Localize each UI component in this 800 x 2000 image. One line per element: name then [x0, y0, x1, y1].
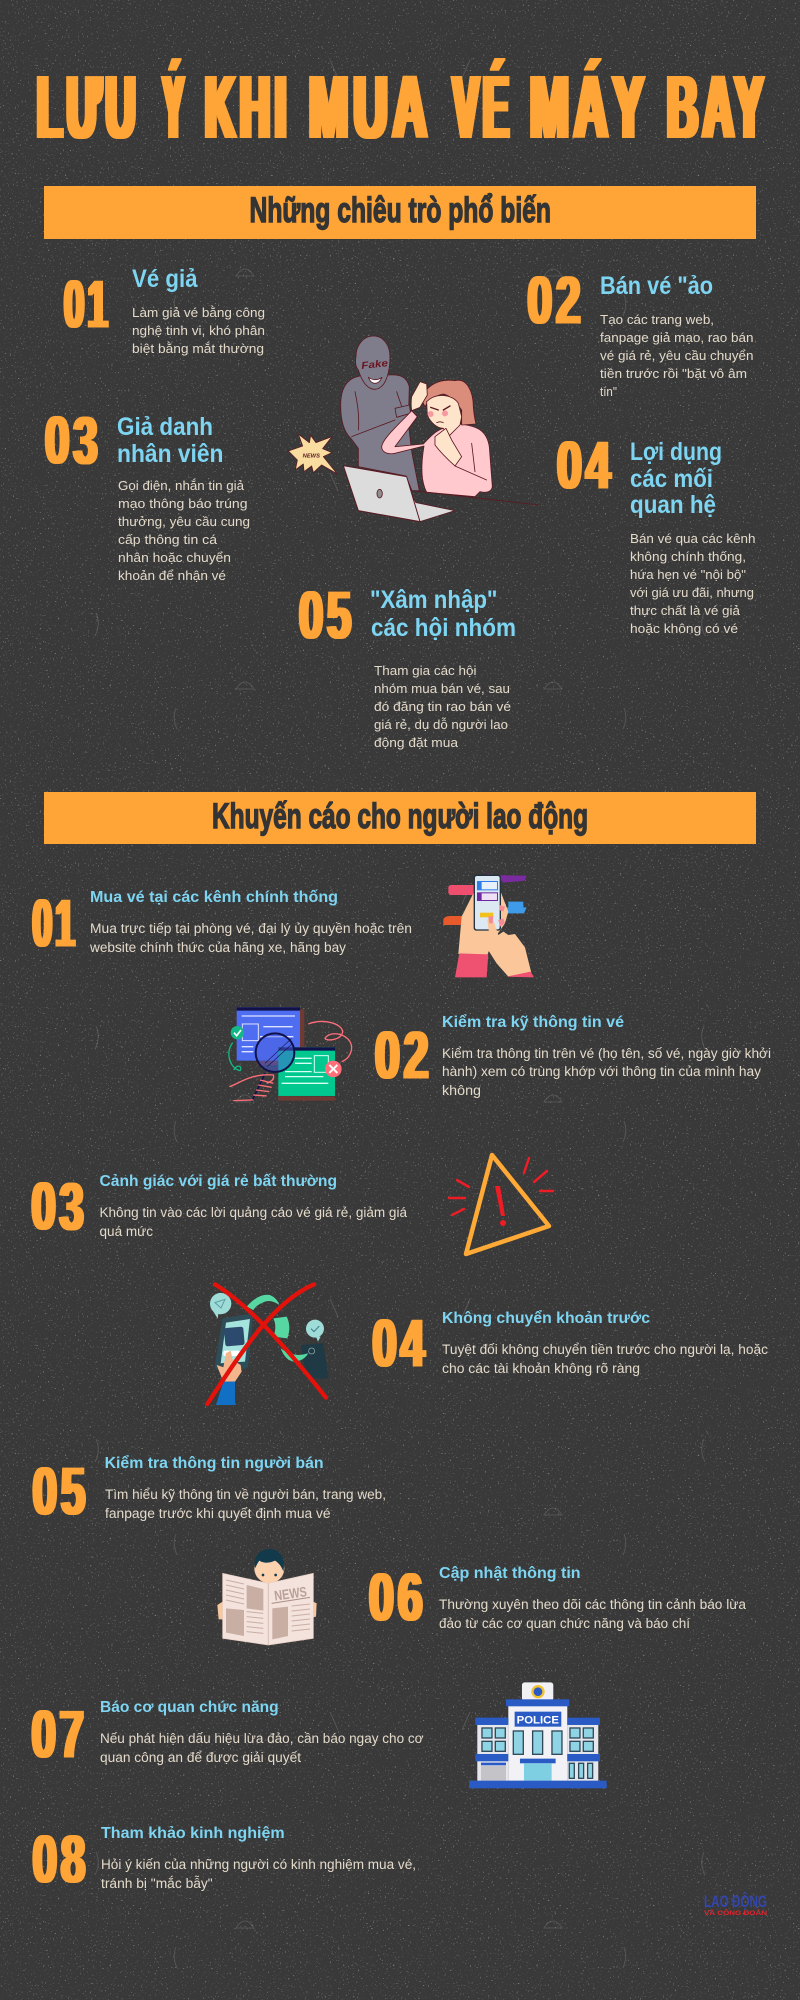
- advice 01: [32, 886, 412, 962]
- description: vé giá rẻ, yêu cầu chuyển: [600, 348, 754, 363]
- receiving phone: [301, 1343, 328, 1379]
- green arrow: [229, 1043, 241, 1071]
- number 02: 02: [528, 262, 584, 338]
- desk line: [413, 491, 539, 505]
- banner heading: Khuyến cáo cho người lao động: [212, 797, 588, 836]
- blue roofs and ledges: [475, 1699, 600, 1765]
- heading: Vé giả: [132, 265, 198, 293]
- description: hứa hẹn vé "nội bộ": [630, 567, 746, 582]
- title: VÉ: [453, 57, 513, 158]
- description: Hỏi ý kiến của những người có kinh nghiệm mua vé,: [101, 1857, 416, 1872]
- heading: Không chuyển khoản trước: [442, 1309, 650, 1327]
- title: MÁY: [530, 57, 649, 158]
- train: [448, 885, 478, 895]
- icon: warning triangle: [449, 1155, 553, 1254]
- hands: [217, 1600, 317, 1619]
- plane: [483, 872, 527, 883]
- description: nghệ tinh vi, khó phân: [132, 323, 265, 338]
- advice 08: [33, 1822, 416, 1898]
- description: quan công an để được giải quyết: [100, 1750, 301, 1765]
- right sleeve: [507, 972, 534, 977]
- illustration: scammer behind worried woman at laptop: [288, 336, 539, 522]
- logo: Lao Động và Công đoàn: [704, 1892, 767, 1917]
- description: động đặt mua: [374, 735, 459, 750]
- description: đó đăng tin rao bán vé: [374, 699, 511, 714]
- description: đảo từ các cơ quan chức năng và báo chí: [439, 1616, 690, 1631]
- left chat bubble: [210, 1293, 231, 1319]
- heading: Báo cơ quan chức năng: [100, 1699, 279, 1716]
- POLICE sign: POLICE: [517, 1715, 559, 1727]
- trick 02: [528, 262, 754, 399]
- description: Tìm hiểu kỹ thông tin về người bán, trang web,: [105, 1487, 386, 1502]
- roof box with badge: [522, 1682, 553, 1701]
- heading: Kiểm tra thông tin người bán: [105, 1454, 324, 1472]
- green document window: [278, 1047, 335, 1096]
- illustration: man reading newspaper: [217, 1549, 317, 1645]
- description: [439, 1597, 746, 1631]
- heading: Lợi dụng: [630, 438, 722, 466]
- entrance doors: [524, 1763, 552, 1781]
- shadow panel: [257, 1009, 335, 1101]
- description: Làm giả vé bằng công: [132, 305, 265, 320]
- left sleeve: [455, 953, 488, 977]
- heading: "Xâm nhập": [370, 586, 498, 614]
- description: website chính thức của hãng xe, hãng bay: [89, 940, 346, 955]
- heading: Cảnh giác với giá rẻ bất thường: [100, 1173, 337, 1190]
- description: không: [442, 1083, 481, 1098]
- number 05: 05: [33, 1454, 89, 1530]
- logo: Lao Động và Công đoàn: LAO ĐỘNG: [704, 1892, 767, 1911]
- title: MUA: [309, 58, 432, 158]
- description: tránh bị "mắc bẫy": [101, 1876, 213, 1891]
- newspaper pages: [223, 1573, 313, 1645]
- description: Kiểm tra thông tin trên vé (họ tên, số vé, ngày giờ khởi: [442, 1046, 771, 1061]
- description: [132, 305, 265, 356]
- sending phone: [215, 1313, 253, 1370]
- advice 02: [375, 1013, 771, 1098]
- description: fanpage giả mạo, rao bán: [600, 330, 754, 345]
- description: hoặc không có vé: [630, 621, 738, 636]
- pointing hand: [485, 918, 532, 977]
- heading: Bán vé "ảo: [600, 272, 713, 300]
- description: tín": [600, 384, 617, 399]
- news burst: NEWS: [303, 453, 320, 459]
- description: tiền trước rồi "bặt vô âm: [600, 366, 747, 381]
- photo blocks: [226, 1585, 288, 1639]
- description: Nếu phát hiện dấu hiệu lừa đảo, cần báo ngay cho cơ: [100, 1731, 424, 1746]
- description: nhân hoặc chuyển: [118, 550, 231, 565]
- description: [89, 921, 412, 955]
- description: [600, 312, 754, 399]
- illustration: police station: [469, 1682, 607, 1788]
- description: Tuyệt đối không chuyển tiền trước cho người lạ, hoặc: [442, 1342, 768, 1357]
- description: mạo thông báo trúng: [118, 496, 248, 511]
- title: LƯU: [37, 58, 140, 158]
- trick 04: quan hệ: [630, 491, 716, 519]
- description: Không tin vào các lời quảng cáo vé giá rẻ, giảm giá: [100, 1205, 407, 1220]
- heading: Cập nhật thông tin: [439, 1565, 581, 1582]
- description: biệt bằng mắt thường: [132, 341, 264, 356]
- number 04: 04: [557, 428, 614, 504]
- description: khoản để nhận vé: [118, 568, 226, 583]
- description: với giá ưu đãi, nhưng: [630, 585, 754, 600]
- description: [100, 1731, 424, 1765]
- description: Mua trực tiếp tại phòng vé, đại lý ủy quyền hoặc trên: [90, 921, 412, 936]
- trick 04: [557, 428, 756, 636]
- news burst: [288, 434, 337, 474]
- number 08: 08: [33, 1822, 89, 1898]
- centre block: [508, 1706, 567, 1781]
- advice 04: [372, 1306, 768, 1382]
- trick 05: [299, 578, 516, 750]
- description: cấp thông tin cá: [118, 532, 218, 547]
- text lines: [226, 1580, 310, 1633]
- trick 05: các hội nhóm: [371, 614, 516, 642]
- logo: Lao Động và Công đoàn: VÀ CÔNG ĐOÀN: [704, 1908, 767, 1917]
- description: Gọi điện, nhắn tin giả: [118, 478, 245, 493]
- advice 05: [33, 1454, 386, 1530]
- number 06: 06: [369, 1560, 426, 1636]
- trick 03: [45, 402, 250, 583]
- description: [374, 663, 511, 750]
- garage door: [481, 1766, 506, 1781]
- section banner: advice: [44, 792, 756, 844]
- description: giá rẻ, dụ dỗ người lao: [374, 717, 508, 732]
- description: [100, 1205, 407, 1239]
- description: [101, 1857, 416, 1891]
- heading: Kiểm tra kỹ thông tin vé: [442, 1013, 624, 1031]
- flying banknotes: [247, 1295, 308, 1362]
- description: nhóm mua bán vé, sau: [374, 681, 510, 696]
- illustration: crossed-out money transfer: [207, 1284, 328, 1405]
- reject badge: [325, 1061, 342, 1077]
- coral arrow: [308, 1022, 352, 1062]
- heading: Mua vé tại các kênh chính thống: [90, 889, 338, 906]
- sleeve: [216, 1382, 235, 1405]
- advice 03: [32, 1168, 407, 1244]
- heading: Giả danh: [117, 413, 213, 441]
- description: fanpage trước khi quyết định mua vé: [105, 1506, 331, 1521]
- bus: [443, 916, 467, 925]
- number 05: 05: [299, 578, 355, 654]
- NEWS masthead: NEWS: [273, 1583, 308, 1604]
- description: [630, 531, 756, 636]
- trick 01: [64, 265, 265, 356]
- ferry: [505, 902, 527, 913]
- heading: Tham khảo kinh nghiệm: [101, 1825, 285, 1842]
- right chat bubble: [306, 1320, 324, 1342]
- check badge: [231, 1026, 244, 1039]
- description: Tham gia các hội: [374, 663, 477, 678]
- laptop: [343, 466, 455, 522]
- number 04: 04: [372, 1306, 428, 1382]
- advice 06: [369, 1560, 746, 1636]
- worried woman: [382, 380, 492, 497]
- description: quá mức: [100, 1224, 153, 1239]
- advice 07: [32, 1696, 424, 1772]
- description: thực chất là vé giả: [630, 603, 741, 618]
- description: Tạo các trang web,: [600, 312, 714, 327]
- windows: [482, 1728, 593, 1778]
- head and hair: [254, 1549, 284, 1583]
- number 03: 03: [45, 402, 102, 478]
- description: [105, 1487, 386, 1521]
- number 07: 07: [32, 1696, 88, 1772]
- trick 04: các mối: [630, 465, 713, 493]
- description: [442, 1342, 768, 1376]
- section banner: common tricks: [44, 186, 756, 239]
- coral hand: [229, 1075, 274, 1101]
- base: [469, 1781, 607, 1788]
- description: Bán vé qua các kênh: [630, 531, 756, 546]
- number 03: 03: [32, 1168, 88, 1244]
- description: hành) xem có trùng khớp với thông tin của mình hay: [442, 1064, 761, 1079]
- red cross: [207, 1284, 326, 1404]
- title: [37, 57, 768, 158]
- magnifier: [252, 1033, 294, 1102]
- blue document window: [237, 1007, 300, 1061]
- trick 03: nhân viên: [117, 440, 224, 468]
- number 02: 02: [375, 1018, 432, 1094]
- description: Thường xuyên theo dõi các thông tin cảnh báo lừa: [439, 1597, 746, 1612]
- description: cho các tài khoản không rõ ràng: [442, 1361, 640, 1376]
- illustration: inspecting documents: [229, 1007, 352, 1102]
- description: không chính thống,: [630, 549, 746, 564]
- phone: [474, 875, 501, 931]
- title: Ý: [163, 57, 187, 158]
- description: thưởng, yêu cầu cung: [118, 514, 250, 529]
- hand: [217, 1351, 242, 1382]
- number 01: 01: [32, 886, 78, 962]
- illustration: phone booking in hands: [443, 872, 534, 977]
- banner heading: Những chiêu trò phổ biến: [250, 191, 551, 230]
- "Fake" lettering: Fake: [361, 358, 389, 372]
- description: [118, 478, 250, 583]
- title: KHI: [205, 58, 291, 158]
- holding hand: [458, 892, 508, 955]
- description: [442, 1046, 771, 1098]
- number 01: 01: [64, 266, 111, 342]
- wings: [477, 1724, 508, 1781]
- scammer figure: [341, 336, 419, 491]
